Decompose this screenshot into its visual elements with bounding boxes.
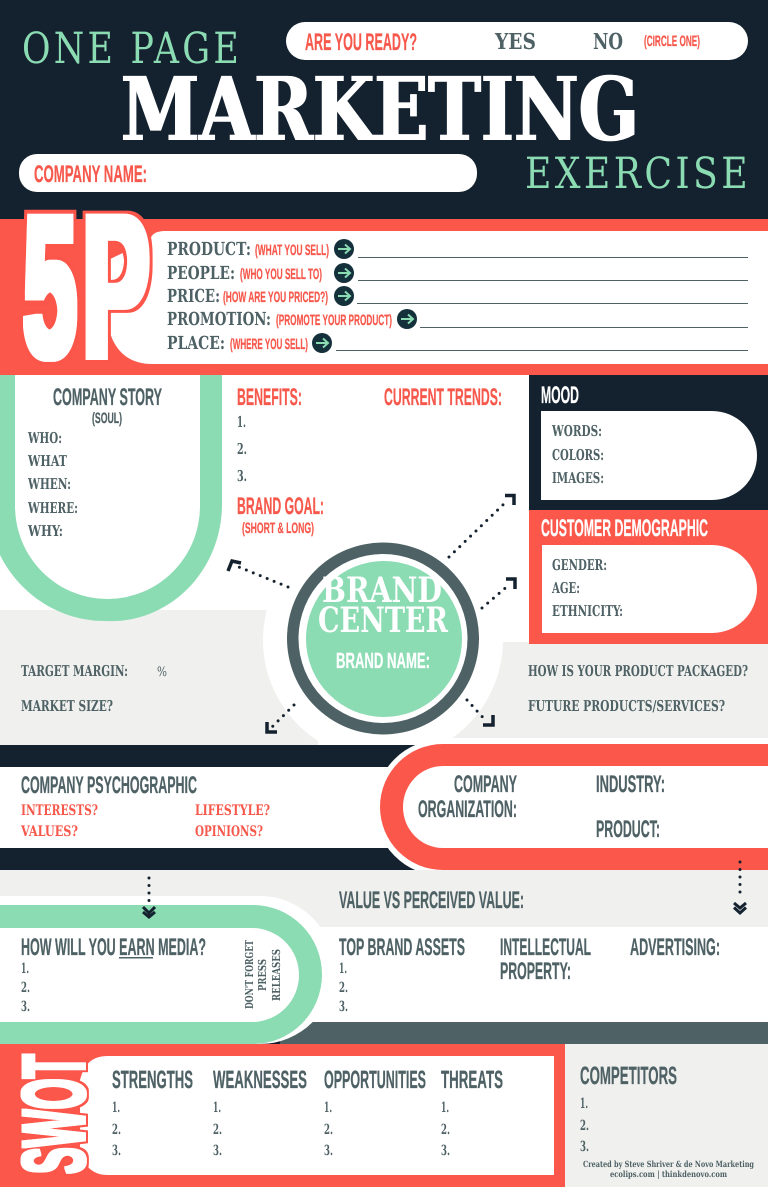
- value vs perceived value heading: VALUE VS PERCEIVED VALUE:: [339, 887, 524, 914]
- column: opportunities: 2.: [324, 1122, 333, 1138]
- row: product: [167, 239, 748, 260]
- lower left metrics: TARGET MARGIN:: [21, 662, 128, 680]
- panel: company organization: [300, 739, 768, 876]
- column: weaknesses: WEAKNESSES: [213, 1066, 307, 1094]
- panel: earned media: 1.: [21, 961, 29, 977]
- credit: [583, 1160, 754, 1180]
- column: threats: 1.: [441, 1100, 449, 1116]
- panel: 5P: [0, 171, 768, 402]
- panel: company story: WHY:: [27, 522, 63, 540]
- column: opportunities: [324, 1066, 426, 1159]
- column: strengths: 2.: [112, 1122, 121, 1138]
- panel: earned media: 3.: [21, 999, 30, 1015]
- lower left metrics: %: [157, 665, 167, 680]
- row: product: PRODUCT:: [167, 239, 251, 260]
- arrow: to customer demographic: [482, 579, 515, 608]
- column: strengths: 1.: [112, 1100, 120, 1116]
- row: people: [167, 263, 748, 284]
- panel: company story: WHO:: [27, 429, 62, 447]
- gray band: [0, 870, 768, 930]
- panel: company psychographic: INTERESTS?: [21, 802, 98, 819]
- header background: [0, 0, 768, 220]
- column: weaknesses: 2.: [213, 1122, 222, 1138]
- lower right questions: [528, 662, 748, 715]
- row: place: (WHERE YOU SELL): [230, 336, 308, 353]
- panel: mood: MOOD: [541, 382, 579, 409]
- row: people: (WHO YOU SELL TO): [240, 266, 322, 283]
- panel: top brand assets: INTELLECTUAL: [500, 934, 591, 961]
- panel: company psychographic: [0, 745, 420, 870]
- panel: customer demographic: ETHNICITY:: [552, 602, 623, 620]
- panel: competitors: COMPETITORS: [580, 1062, 677, 1090]
- panel: mood: [529, 375, 768, 510]
- arrow: to psychographic: [267, 705, 294, 732]
- arrow: down to value: [734, 862, 746, 913]
- panel: SWOT: [0, 1044, 565, 1187]
- company name pill: COMPANY NAME:: [34, 161, 147, 188]
- row: price: (HOW ARE YOU PRICED?): [223, 289, 328, 306]
- column: strengths: 3.: [112, 1143, 121, 1159]
- panel: mood: COLORS:: [552, 446, 604, 464]
- panel: company story: WHAT: [27, 452, 68, 470]
- panel: earned media: HOW WILL YOU EARN MEDIA?: [21, 934, 206, 961]
- row: promotion: PROMOTION:: [167, 309, 271, 330]
- panel: company story: [0, 375, 222, 621]
- panel: earned media: [0, 896, 334, 1044]
- row: product: (WHAT YOU SELL): [255, 242, 329, 259]
- column: strengths: STRENGTHS: [112, 1066, 193, 1094]
- rotated note: [243, 939, 283, 1009]
- column: weaknesses: [213, 1066, 307, 1159]
- row: price: PRICE:: [167, 286, 220, 307]
- rotated note: PRESS: [256, 959, 269, 991]
- panel: company organization: PRODUCT:: [596, 816, 660, 843]
- panel: benefits and trends: 1.: [237, 413, 246, 431]
- panel: 5P: P: [83, 171, 149, 402]
- panel: company psychographic: OPINIONS?: [195, 823, 263, 840]
- rotated note: DON'T FORGET: [243, 939, 256, 1009]
- row: promotion: (PROMOTE YOUR PRODUCT): [276, 312, 392, 329]
- panel: competitors: [565, 1044, 768, 1187]
- column: strengths: [112, 1066, 193, 1159]
- panel: benefits and trends: 3.: [237, 467, 247, 485]
- panel: customer demographic: GENDER:: [552, 556, 607, 574]
- lower left metrics: [21, 662, 167, 715]
- brand center circle: [287, 542, 479, 734]
- panel: 5P: 5: [23, 176, 77, 397]
- panel: benefits and trends: BRAND GOAL:: [237, 493, 324, 520]
- arrow: to company story: [228, 561, 288, 587]
- panel: company psychographic: VALUES?: [20, 823, 78, 840]
- column: threats: 2.: [441, 1122, 450, 1138]
- row: place: PLACE:: [167, 333, 225, 354]
- ready question pill: ARE YOU READY?: [305, 29, 417, 56]
- panel: mood: IMAGES:: [552, 469, 604, 487]
- panel: company story: (SOUL): [92, 410, 122, 427]
- column: opportunities: 3.: [324, 1143, 333, 1159]
- column: weaknesses: 3.: [213, 1143, 222, 1159]
- panel: benefits and trends: BENEFITS:: [237, 384, 302, 411]
- column: threats: 3.: [441, 1143, 450, 1159]
- panel: competitors: 3.: [580, 1139, 589, 1155]
- brand center circle: CENTER: [318, 600, 449, 641]
- column: opportunities: 1.: [324, 1100, 332, 1116]
- ready question pill: (CIRCLE ONE): [644, 33, 700, 50]
- middle section background: [0, 375, 768, 760]
- company name pill: [19, 154, 477, 192]
- ready question pill: [286, 22, 748, 60]
- column: threats: [441, 1066, 503, 1159]
- panel: competitors: 1.: [580, 1096, 588, 1112]
- panel: competitors: 2.: [580, 1118, 589, 1134]
- row: place: [167, 333, 748, 354]
- panel: SWOT: OPPORTUNITIES: [324, 1066, 426, 1094]
- brand center circle: BRAND: [322, 570, 442, 611]
- panel: company story: WHEN:: [27, 475, 71, 493]
- ready question pill: YES: [494, 29, 536, 55]
- panel: top brand assets: 2.: [339, 980, 348, 996]
- panel: company psychographic: COMPANY PSYCHOGRAPHIC: [21, 772, 197, 799]
- column: threats: THREATS: [441, 1066, 503, 1094]
- panel: company organization: INDUSTRY:: [596, 771, 665, 798]
- rotated note: RELEASES: [270, 949, 283, 1001]
- row: people: PEOPLE:: [167, 263, 235, 284]
- lower left metrics: MARKET SIZE?: [21, 697, 113, 715]
- panel: company psychographic: LIFESTYLE?: [195, 802, 270, 819]
- brand center circle: BRAND NAME:: [336, 648, 430, 673]
- panel: top brand assets: PROPERTY:: [500, 958, 571, 985]
- panel: top brand assets: 1.: [339, 961, 347, 977]
- text: SWOT: [4, 1054, 103, 1174]
- panel: top brand assets: 3.: [339, 999, 348, 1015]
- panel: company organization: COMPANY: [454, 771, 517, 798]
- panel: company organization: ORGANIZATION:: [418, 796, 517, 823]
- ready question pill: NO: [593, 29, 623, 55]
- panel: mood: WORDS:: [551, 422, 602, 440]
- panel: company story: WHERE:: [27, 499, 78, 517]
- panel: benefits and trends: 2.: [237, 440, 247, 458]
- panel: benefits and trends: CURRENT TRENDS:: [384, 384, 502, 411]
- arrow: down to earned media: [143, 878, 155, 917]
- panel: benefits and trends: (SHORT & LONG): [242, 520, 314, 537]
- panel: top brand assets: [280, 927, 768, 1044]
- arrow: to packaging: [467, 700, 493, 725]
- panel: customer demographic: AGE:: [551, 579, 580, 597]
- row: price: [167, 286, 748, 307]
- arrow: to current trends: [449, 496, 514, 557]
- column: weaknesses: 1.: [213, 1100, 221, 1116]
- row: promotion: [167, 309, 748, 330]
- title: one page: ONE PAGE: [22, 24, 242, 74]
- title: marketing: MARKETING: [121, 57, 639, 161]
- credit: ecolips.com | thinkdenovo.com: [610, 1170, 727, 1180]
- panel: company story: COMPANY STORY: [53, 384, 162, 411]
- panel: benefits and trends: [237, 384, 502, 537]
- panel: top brand assets: TOP BRAND ASSETS: [339, 934, 465, 961]
- panel: customer demographic: [529, 510, 768, 644]
- panel: earned media: 2.: [21, 980, 30, 996]
